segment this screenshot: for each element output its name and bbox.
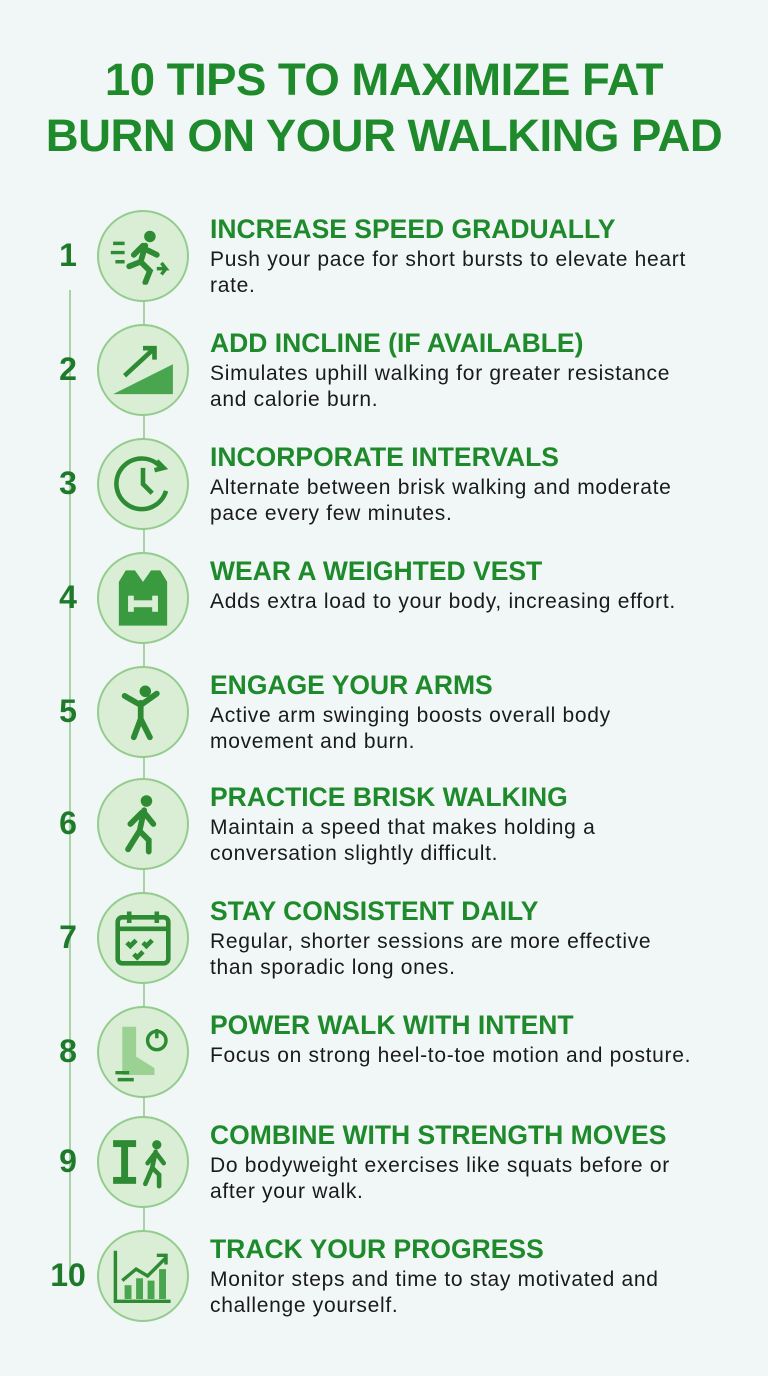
tip 10: TRACK YOUR PROGRESS bbox=[210, 1234, 544, 1264]
tip 5: 5 bbox=[59, 693, 77, 729]
tip 7: STAY CONSISTENT DAILY bbox=[210, 896, 538, 926]
tip 9: COMBINE WITH STRENGTH MOVES bbox=[210, 1120, 666, 1150]
tip 9: 9 bbox=[59, 1143, 77, 1179]
icon: incline bbox=[97, 324, 189, 416]
tip 4 bbox=[59, 552, 676, 644]
tip 10: Monitor steps and time to stay motivated and challenge yourself. bbox=[210, 1268, 659, 1317]
tip 4: WEAR A WEIGHTED VEST bbox=[210, 556, 542, 586]
tip 6: PRACTICE BRISK WALKING bbox=[210, 782, 568, 812]
tip 3: 3 bbox=[59, 465, 77, 501]
tip 3: INCORPORATE INTERVALS bbox=[210, 442, 559, 472]
tip 5: ENGAGE YOUR ARMS bbox=[210, 670, 493, 700]
tip 7: 7 bbox=[59, 919, 77, 955]
tip 2 bbox=[59, 324, 670, 416]
tip 10 bbox=[50, 1230, 659, 1322]
tip 4: 4 bbox=[59, 579, 77, 615]
tip 3: Alternate between brisk walking and moderate pace every few minutes. bbox=[210, 476, 672, 525]
tip 1 bbox=[59, 210, 686, 302]
tip 1: 1 bbox=[59, 237, 77, 273]
tip 8: POWER WALK WITH INTENT bbox=[210, 1010, 574, 1040]
tip 3 bbox=[59, 438, 672, 530]
title: BURN ON YOUR WALKING PAD bbox=[46, 110, 722, 161]
tip 8: 8 bbox=[59, 1033, 77, 1069]
tip 6: Maintain a speed that makes holding a conversation slightly difficult. bbox=[210, 816, 595, 865]
tip 5: Active arm swinging boosts overall body movement and burn. bbox=[210, 704, 611, 753]
icon: clock bbox=[97, 438, 189, 530]
title bbox=[46, 54, 722, 161]
tip 6 bbox=[59, 778, 595, 870]
icon: calendar bbox=[97, 892, 189, 984]
icon: runner bbox=[97, 210, 189, 302]
tip 5 bbox=[59, 666, 611, 758]
tip 2: 2 bbox=[59, 351, 77, 387]
tip 4: Adds extra load to your body, increasing effort. bbox=[210, 590, 676, 613]
tip 7: Regular, shorter sessions are more effective than sporadic long ones. bbox=[210, 930, 651, 979]
tip 8: Focus on strong heel-to-toe motion and posture. bbox=[210, 1044, 691, 1067]
icon: foot bbox=[97, 1006, 189, 1098]
tip 10: 10 bbox=[50, 1257, 86, 1293]
tip 9 bbox=[59, 1116, 670, 1208]
tip 9: Do bodyweight exercises like squats before or after your walk. bbox=[210, 1154, 670, 1203]
tip 8 bbox=[59, 1006, 691, 1098]
tip 6: 6 bbox=[59, 805, 77, 841]
icon: arms bbox=[97, 666, 189, 758]
tip 7 bbox=[59, 892, 651, 984]
tip 2: ADD INCLINE (IF AVAILABLE) bbox=[210, 328, 583, 358]
tip 1: Push your pace for short bursts to elevate heart rate. bbox=[210, 248, 686, 297]
icon: dumbbell and walker bbox=[97, 1116, 189, 1208]
icon: walker bbox=[97, 778, 189, 870]
icon: vest bbox=[97, 552, 189, 644]
tip 1: INCREASE SPEED GRADUALLY bbox=[210, 214, 615, 244]
tip 2: Simulates uphill walking for greater resistance and calorie burn. bbox=[210, 362, 670, 411]
icon: chart bbox=[97, 1230, 189, 1322]
title: 10 TIPS TO MAXIMIZE FAT bbox=[105, 54, 663, 105]
